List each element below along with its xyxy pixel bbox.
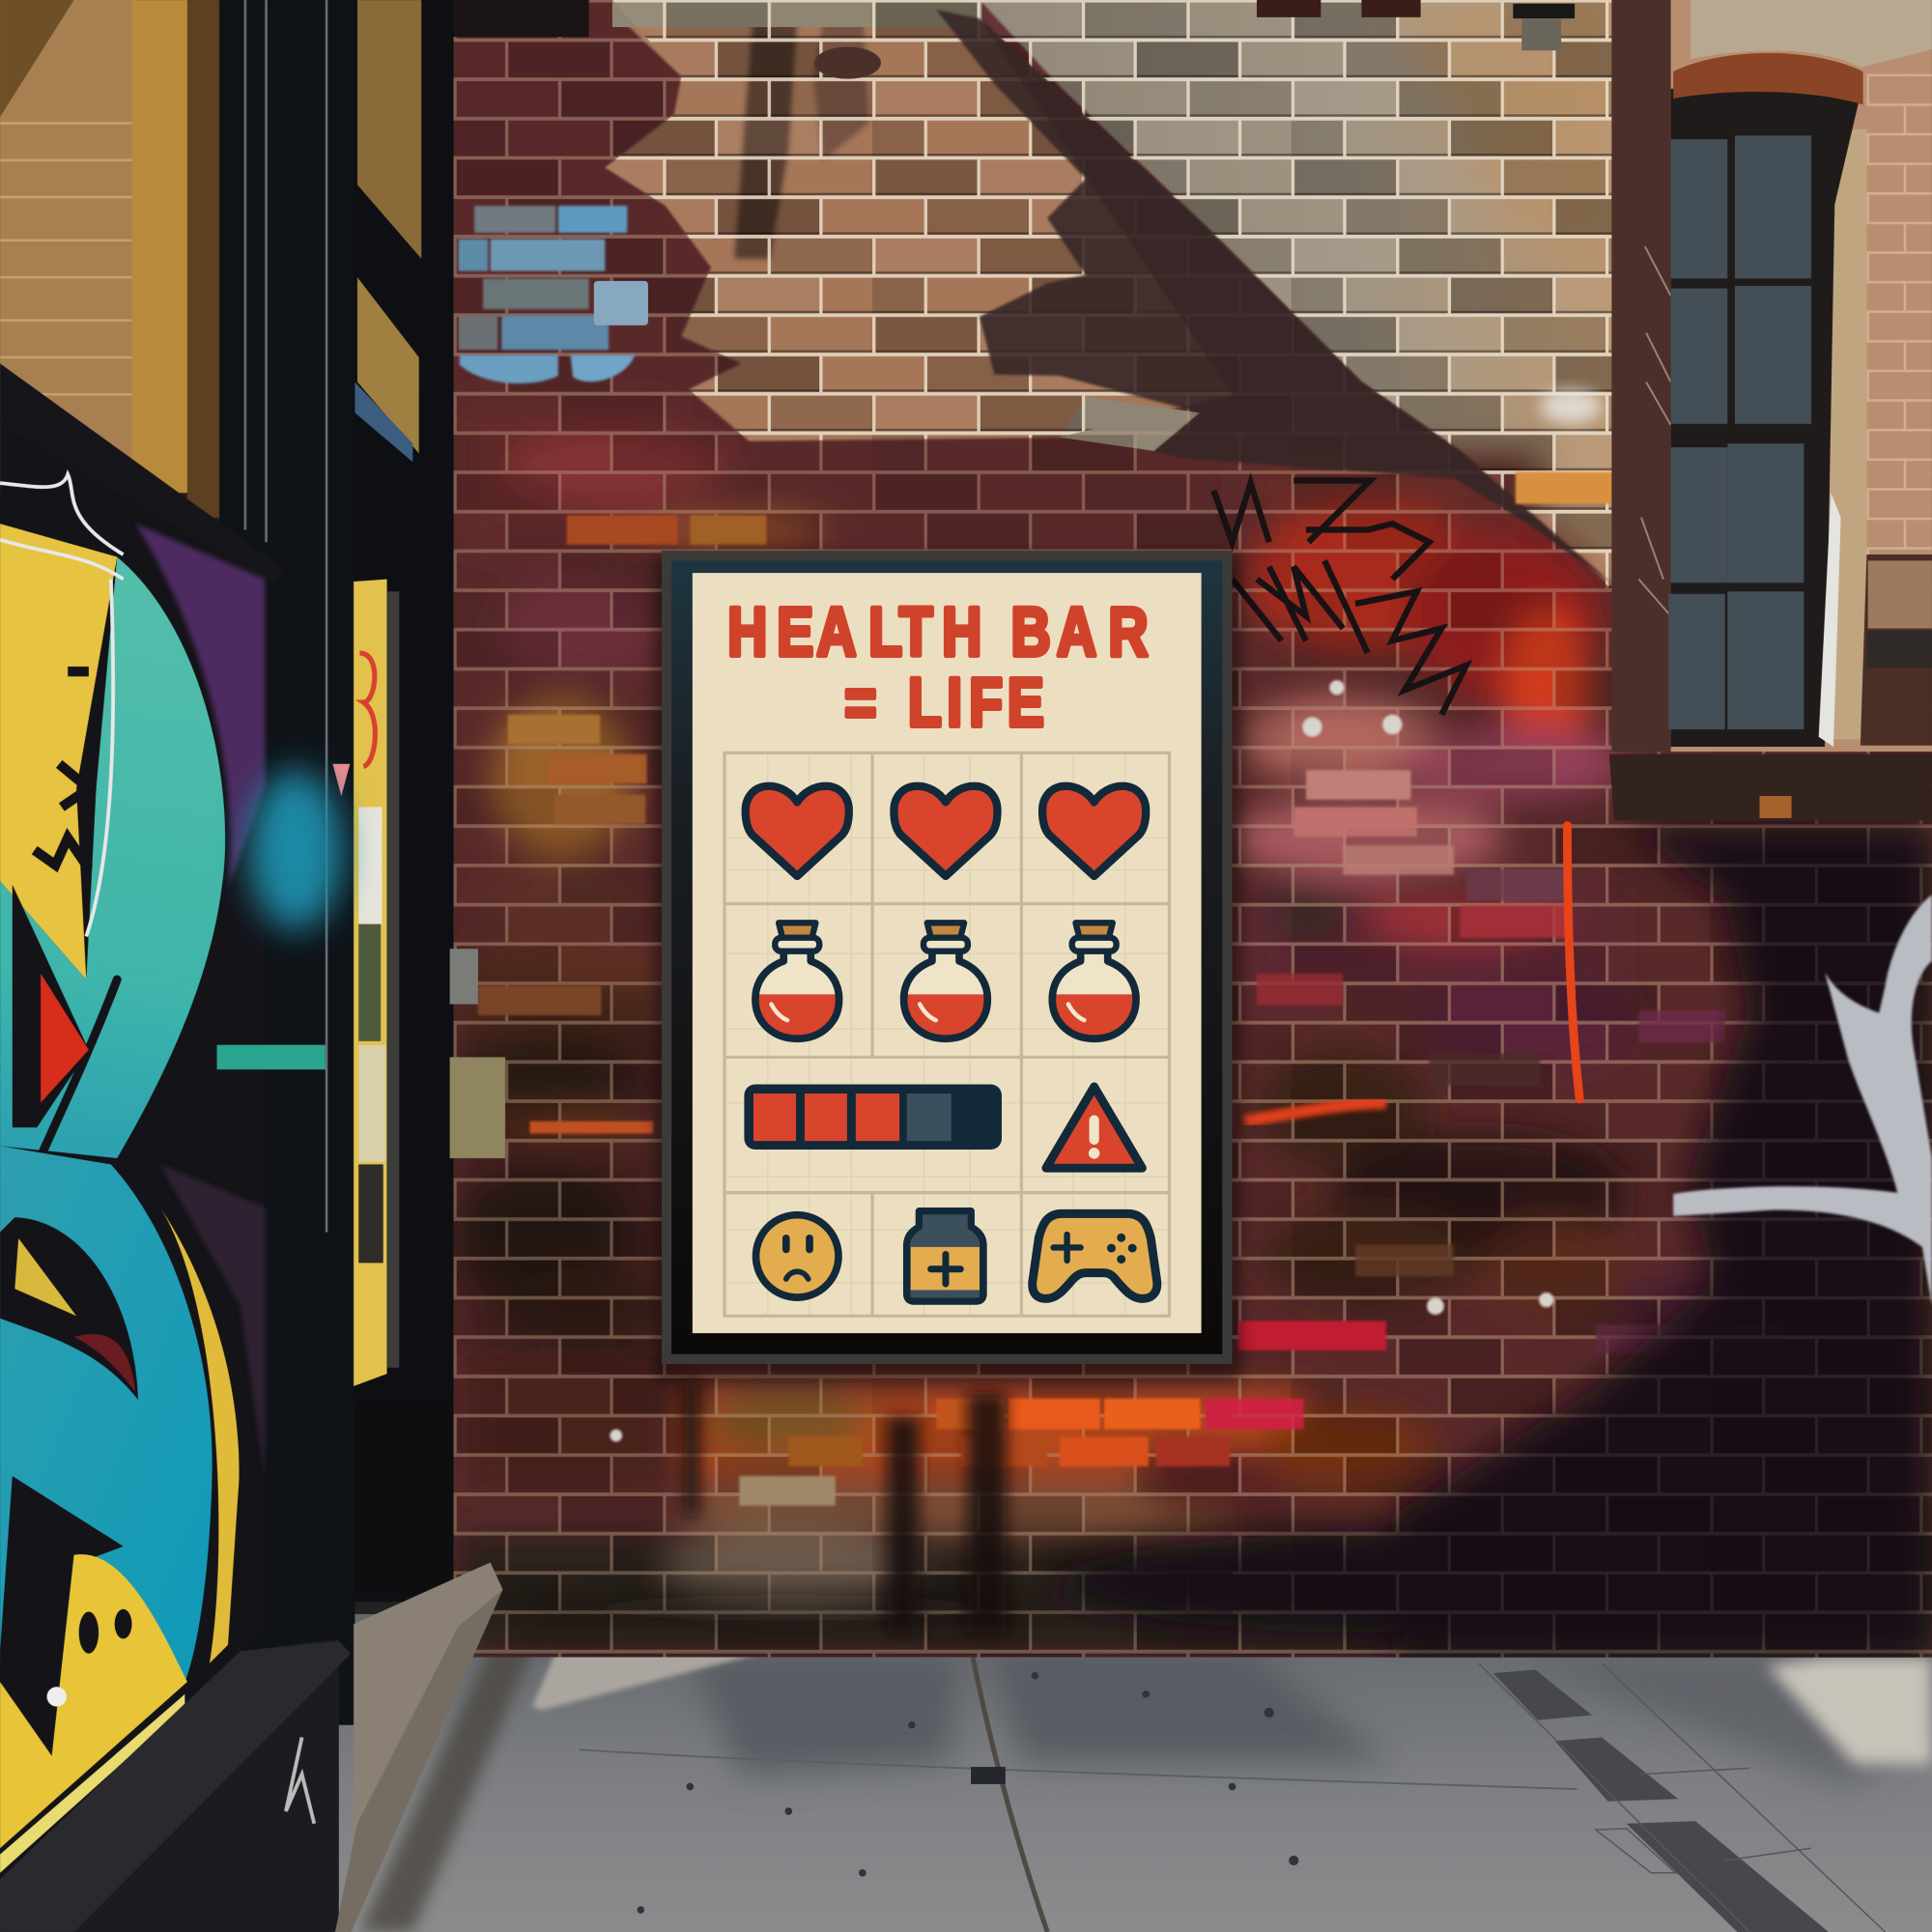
diagonal shadow band <box>936 10 1614 585</box>
wall fixtures <box>450 949 505 1158</box>
door stickers <box>358 807 385 1263</box>
wall brackets top <box>1257 0 1421 17</box>
black lens <box>0 1217 138 1400</box>
health bar <box>744 1084 1002 1150</box>
poster frame <box>656 551 1240 1380</box>
metal bracket <box>450 949 478 1005</box>
icon: heart 3 <box>1042 786 1146 876</box>
purple dark lower <box>160 1164 265 1479</box>
icon: medicine bottle <box>907 1211 983 1301</box>
window reveal <box>1825 129 1866 739</box>
dark bricks behind ledge <box>1861 554 1932 746</box>
brass box <box>450 1057 505 1158</box>
title: = LIFE <box>844 663 1044 741</box>
left wall tones <box>469 406 640 537</box>
lantern box <box>1521 18 1561 50</box>
yellow upper <box>0 524 117 980</box>
pillar highlights <box>245 0 327 1233</box>
white spray on dark bricks <box>1673 895 1932 1306</box>
sunlit terracotta bricks <box>605 11 1233 441</box>
sunlit paving patch <box>1767 1658 1932 1765</box>
wall junction box <box>594 281 648 326</box>
mortar: lower wall <box>453 431 1932 1663</box>
poster sheet <box>693 573 1202 1333</box>
frame shadow <box>656 554 1240 1380</box>
icon: potion 2 <box>904 923 987 1038</box>
title <box>727 592 1149 741</box>
window reveal highlight <box>1819 493 1841 747</box>
yellow lens wedge <box>14 1238 76 1316</box>
concrete step <box>335 1562 502 1932</box>
red paint drip <box>1567 826 1579 1099</box>
black zigzags <box>35 671 89 868</box>
mortar: sunlit <box>453 0 1932 640</box>
white spray dot <box>46 1687 67 1707</box>
window sill <box>1609 754 1932 820</box>
pier sun streaks <box>1638 246 1671 616</box>
mid door glass <box>357 277 419 453</box>
icon: heart 1 <box>746 786 849 876</box>
white highlight patch <box>1540 389 1602 424</box>
pavement shadows <box>690 1645 1932 1786</box>
black triangle <box>13 885 89 1127</box>
pale yellow base edge <box>0 1694 185 1873</box>
red triangle <box>41 974 89 1103</box>
mortar: upper left <box>453 0 1618 431</box>
drain cover <box>971 1767 1006 1784</box>
yellow lower <box>0 1554 187 1848</box>
black lower shape <box>0 1476 124 1765</box>
orange band below poster <box>690 1390 1306 1476</box>
sill rust patch <box>1759 796 1792 818</box>
warm sunlit bricks right <box>1403 3 1605 232</box>
black tag graffiti <box>1213 480 1466 715</box>
left building <box>0 0 502 1932</box>
window section <box>1609 0 1932 820</box>
arch brick lintel <box>1673 53 1863 104</box>
black pillar <box>219 0 355 1725</box>
white paint flecks <box>610 680 1553 1441</box>
orange lit bricks <box>1516 472 1614 504</box>
door column <box>354 0 453 1602</box>
white tag on plinth <box>286 1737 314 1824</box>
icon: warning triangle <box>1046 1087 1142 1168</box>
red spray streak <box>1244 1103 1386 1122</box>
teal lower <box>0 1146 213 1682</box>
window frame <box>1671 89 1861 747</box>
dark paving strip <box>1493 1669 1829 1932</box>
ledge light <box>1868 560 1932 629</box>
graffiti panel <box>0 419 265 1886</box>
upper door glass <box>357 0 421 259</box>
icon: heart 2 <box>894 786 998 876</box>
wall colour washes <box>456 401 1932 1658</box>
door blue sign <box>355 382 412 462</box>
dark red lens wedge <box>74 1334 135 1392</box>
cyan spray across pillar <box>249 770 343 930</box>
yellow stripe <box>160 1208 239 1663</box>
brick courses <box>0 124 131 394</box>
icon: potion 3 <box>1052 923 1136 1038</box>
beige lit pocket <box>1060 397 1200 451</box>
icon: sad face <box>756 1215 838 1297</box>
pole shadows <box>734 0 868 259</box>
panel top edge <box>0 363 285 584</box>
paving seams <box>1479 1663 1886 1932</box>
icon: game controller <box>1033 1213 1157 1298</box>
teal stripe <box>216 1045 326 1069</box>
purple spray <box>135 524 265 887</box>
brick pier <box>1611 0 1673 752</box>
black plinth <box>0 1638 339 1932</box>
spray dots <box>79 1609 131 1654</box>
step side shade <box>335 1589 502 1932</box>
teal upper <box>0 557 225 1158</box>
red tag on door <box>359 653 375 766</box>
sunlit beige bricks <box>980 0 1614 589</box>
pavement crack <box>969 1635 1047 1932</box>
black spray mass right <box>493 826 1932 1658</box>
door yellow poster strip <box>354 579 387 1386</box>
diagonal shadow on tan wall <box>0 0 74 117</box>
black swoosh <box>35 980 117 1171</box>
debris dots <box>637 1672 1298 1914</box>
frame inner <box>671 560 1222 1354</box>
frame outer <box>662 551 1233 1364</box>
small red bar <box>1238 1321 1386 1350</box>
red graffiti zone right of poster <box>1244 456 1540 518</box>
white sketch lines <box>0 474 124 936</box>
faint mortar over black spray <box>1233 826 1932 1663</box>
brick wall <box>453 0 1932 1663</box>
blue graffiti bricks <box>458 206 635 384</box>
window glass panes <box>1668 135 1811 729</box>
ochre panel <box>131 0 188 493</box>
left wall darkening <box>458 985 662 1355</box>
right building wall <box>1671 0 1932 752</box>
sunlit concrete patch <box>532 1627 863 1710</box>
title: HEALTH BAR <box>727 592 1149 670</box>
pink triangle sticker <box>332 764 350 796</box>
right wall brick lines <box>1866 74 1932 554</box>
icon: potion 1 <box>755 923 839 1038</box>
ledge shelf <box>1866 631 1932 668</box>
plinth top <box>0 1641 352 1932</box>
pipe clamp hole <box>814 46 881 79</box>
door frame edge <box>387 591 399 1368</box>
top left shadow box <box>453 0 589 37</box>
dark door base <box>354 1405 453 1589</box>
icon grid <box>724 753 1169 1316</box>
individual painted bricks <box>478 515 1784 1506</box>
upper left shaded bricks <box>453 37 663 210</box>
brown panel <box>187 0 220 518</box>
tan brick wall <box>0 0 135 493</box>
bracket black <box>1513 4 1575 18</box>
dark bottom <box>458 1534 1932 1658</box>
vertical figure shadows <box>684 1380 1007 1633</box>
pavement <box>332 1614 1932 1932</box>
curbside dirt <box>359 1614 537 1932</box>
stone arch <box>1690 0 1932 68</box>
